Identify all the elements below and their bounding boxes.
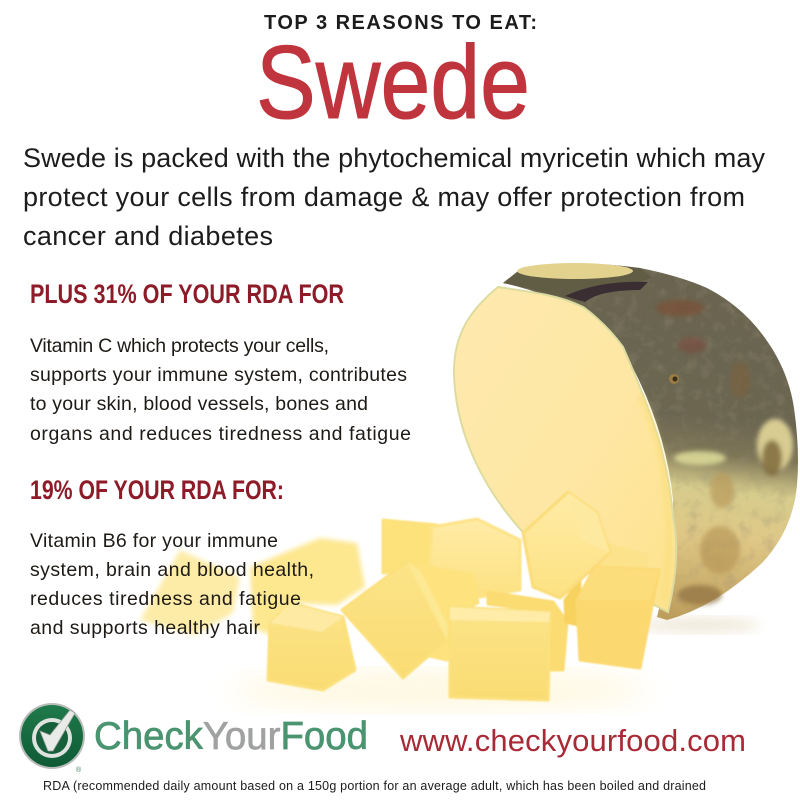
intro text: Swede is packed with the phytochemical myricetin which may [23,143,766,173]
front big cube [450,607,550,700]
illustration: swede cubes [140,492,659,700]
flesh rim shading [640,395,669,600]
footnote: RDA (recommended daily amount based on a 150g portion for an average adult, which has been boiled and drained [43,779,706,793]
text block: vitamin B6: Vitamin B6 for your immune [30,530,278,552]
text block: vitamin C: supports your immune system, contributes [30,364,407,386]
text block: vitamin B6: system, brain and blood health, [30,559,314,581]
text block: vitamin B6 [30,530,314,639]
text block: vitamin B6: reduces tiredness and fatigue [30,588,301,610]
text block: vitamin C: organs and reduces tiredness and fatigue [30,423,411,445]
logo wordmark: CheckYourFood [94,715,368,758]
small cube [415,565,478,660]
front left cube [268,603,355,690]
swede skin [503,266,798,620]
right front cube [577,567,659,668]
tilted middle cube [342,562,447,678]
faded cube 2 [250,538,365,635]
logo icon: check mark badge [19,703,85,774]
intro text: protect your cells from damage & may offer protection from [23,182,745,212]
text block: vitamin B6: and supports healthy hair [30,617,260,639]
heading: 19% RDA: 19% OF YOUR RDA FOR: [30,475,284,505]
ground reflection [230,617,760,710]
title: Swede [256,25,530,141]
heading: 31% RDA: PLUS 31% OF YOUR RDA FOR [30,279,344,309]
tilted large cube [523,492,610,598]
top stem [503,264,652,302]
cut flesh face [454,287,676,612]
back cube [383,520,437,573]
intro text [23,143,766,251]
brown blemishes [656,300,793,605]
logo icon: check mark badge: ® [76,766,82,774]
illustration: whole swede cut in half [454,263,798,620]
website url: www.checkyourfood.com [399,723,746,758]
small heading: TOP 3 REASONS TO EAT: [264,12,537,34]
intro text: cancer and diabetes [23,221,273,251]
right back cube [488,592,567,670]
text block: vitamin C [30,335,411,445]
text block: vitamin C: Vitamin C which protects your cells, [30,335,329,357]
faded cube behind text [140,550,240,635]
back cube 2 [430,519,520,597]
text block: vitamin C: to your skin, blood vessels, bones and [30,393,368,415]
